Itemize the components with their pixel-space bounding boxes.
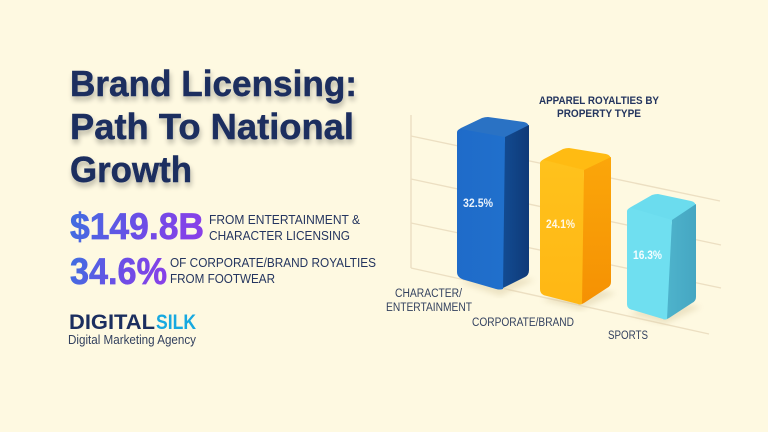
title: Brand Licensing:	[70, 63, 357, 104]
logo: Digital Silk	[68, 311, 197, 347]
category labels: ENTERTAINMENT	[386, 302, 472, 314]
chart grid	[411, 115, 721, 334]
stat: footwear royalties: OF CORPORATE/BRAND ROYALTIES	[170, 255, 376, 270]
bar chart	[386, 115, 721, 342]
value label: 32.5%	[463, 198, 493, 210]
category labels	[386, 288, 648, 342]
category labels: CORPORATE/BRAND	[472, 317, 574, 329]
title: Growth	[70, 149, 192, 190]
stat: footwear royalties: 34.6%	[70, 251, 167, 292]
value label: 24.1%	[546, 219, 575, 231]
chart title: APPAREL ROYALTIES BY	[539, 95, 660, 107]
stat: entertainment licensing	[70, 206, 360, 247]
value label: 16.3%	[633, 250, 662, 262]
bar: sports 16.3%	[627, 194, 701, 324]
stat: footwear royalties	[70, 251, 376, 292]
logo: Digital Silk: DIGITAL	[69, 311, 155, 334]
stat: entertainment licensing: CHARACTER LICENSING	[209, 228, 350, 243]
chart title	[539, 95, 660, 120]
stat: entertainment licensing: FROM ENTERTAINMENT &	[209, 212, 360, 227]
logo: Digital Silk: SILK	[156, 311, 196, 334]
title: Path To National	[70, 106, 354, 147]
bar: character/entertainment 32.5%	[457, 117, 535, 296]
bar: corporate/brand 24.1%	[540, 148, 616, 310]
category labels: SPORTS	[608, 330, 648, 342]
chart title: PROPERTY TYPE	[557, 108, 641, 120]
stat: entertainment licensing: $149.8B	[70, 206, 204, 247]
title	[70, 63, 357, 190]
category labels: CHARACTER/	[395, 288, 463, 300]
stat: footwear royalties: FROM FOOTWEAR	[170, 271, 275, 286]
logo: Digital Silk: Digital Marketing Agency	[68, 333, 197, 347]
